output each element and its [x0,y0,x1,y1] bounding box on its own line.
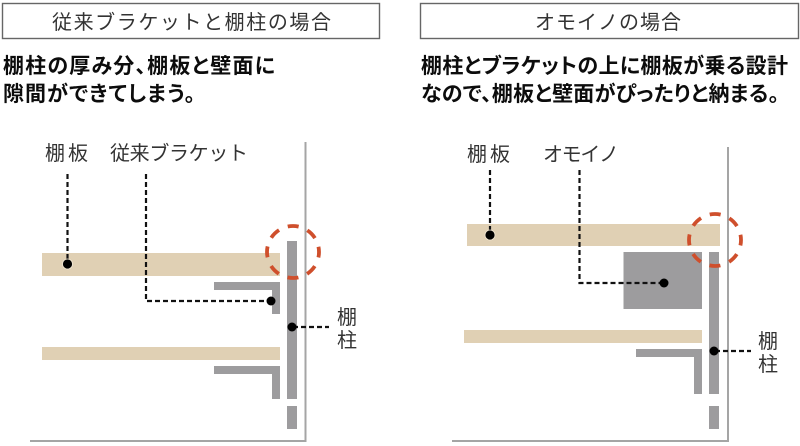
diagram: omoino shelf section [452,143,778,441]
shelf post [709,252,719,429]
label: conventional bracket: 従来ブラケット [110,141,248,165]
text block: conventional description: 隙間ができてしまう。 [3,82,195,106]
diagram: conventional shelf section [30,141,357,441]
text block: conventional description [3,55,275,106]
label: shelf board [45,142,88,269]
shelf board upper [467,224,720,246]
shelf board lower [42,347,280,360]
label: shelf post [710,330,778,376]
label: conventional bracket [110,141,276,306]
omoino block [624,252,702,309]
panel: omoino [420,4,798,441]
callout: flush circle [689,214,741,266]
shelf board upper [42,253,280,276]
label: shelf post: 柱 [337,329,357,352]
text block: omoino description: 棚柱とブラケットの上に棚板が乗る設計 [421,54,788,78]
shelf post [287,241,297,429]
text block: omoino description: なので、棚板と壁面がぴったりと納まる。 [421,82,779,106]
bracket lower [214,366,280,399]
label: shelf post: 棚 [758,330,778,353]
text block: conventional description: 棚柱の厚み分、棚板と壁面に [3,55,275,78]
shelf board lower [464,330,702,343]
label: shelf board [467,143,510,240]
label: omoino: オモイノ [543,144,619,166]
wall [30,142,306,441]
heading: omoino [420,4,798,38]
label: shelf board: 棚板 [45,142,88,165]
bracket upper [214,282,280,314]
heading: conventional bracket [2,4,380,38]
label: shelf post: 柱 [758,353,778,376]
label: omoino [543,144,668,288]
callout: gap circle [267,226,319,278]
label: shelf post: 棚 [337,306,357,329]
heading: omoino: オモイノの場合 [535,11,681,34]
panel: conventional bracket [2,4,380,441]
text block: omoino description [421,54,788,106]
heading: conventional bracket: 従来ブラケットと棚柱の場合 [52,10,331,34]
wall [452,147,728,441]
label: shelf post [288,306,357,352]
bracket [636,349,702,394]
label: shelf board: 棚板 [467,143,510,166]
